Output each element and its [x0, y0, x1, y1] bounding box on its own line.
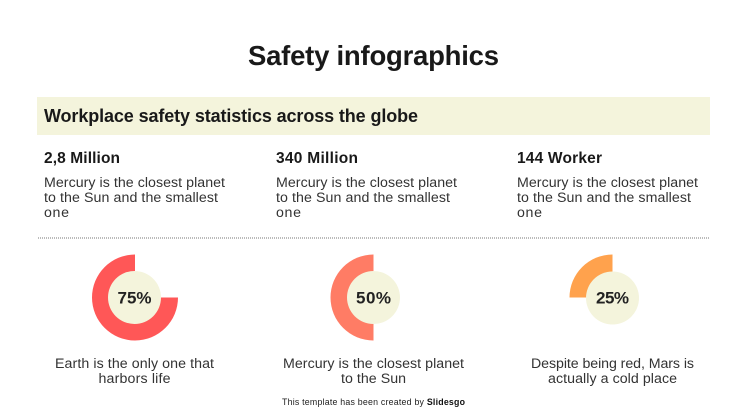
stat block: 144 Worker: 144 Worker: [517, 150, 602, 167]
stat block: 144 Worker: [517, 150, 698, 221]
donut chart: 75%: 75%: [118, 288, 152, 308]
stat block: 340 Million: one: [276, 205, 301, 221]
caption: 75%: [55, 356, 214, 387]
footer credit: This template has been created by Slidesgo: [282, 397, 466, 407]
stat block: 2,8 Million: Mercury is the closest planet: [44, 175, 225, 191]
caption: 75%: harbors life: [98, 371, 171, 387]
caption: 25%: Despite being red, Mars is: [531, 356, 694, 372]
stat block: 144 Worker: one: [517, 205, 542, 221]
stat block: 2,8 Million: to the Sun and the smallest: [44, 190, 218, 206]
caption: 75%: Earth is the only one that: [55, 356, 214, 372]
banner: section heading: [37, 97, 710, 135]
stat block: 2,8 Million: [44, 150, 225, 221]
stat block: 340 Million: 340 Million: [276, 150, 358, 167]
caption: 50%: Mercury is the closest planet: [283, 356, 464, 372]
stat block: 2,8 Million: 2,8 Million: [44, 150, 120, 167]
caption: 50%: to the Sun: [341, 371, 406, 387]
stat block: 2,8 Million: one: [44, 205, 69, 221]
title: Safety infographics: [248, 40, 499, 71]
stat block: 144 Worker: to the Sun and the smallest: [517, 190, 691, 206]
donut chart: 25%: [570, 254, 639, 324]
stat block: 340 Million: to the Sun and the smallest: [276, 190, 450, 206]
stat block: 340 Million: Mercury is the closest planet: [276, 175, 457, 191]
banner: section heading: Workplace safety statistics across the globe: [44, 106, 418, 126]
caption: 25%: [531, 356, 694, 387]
caption: 50%: [283, 356, 464, 387]
donut chart: 25%: 25%: [596, 288, 629, 308]
donut chart: 50%: [330, 254, 400, 340]
stat block: 340 Million: [276, 150, 457, 221]
donut chart: 50%: 50%: [356, 288, 391, 308]
stat block: 144 Worker: Mercury is the closest planet: [517, 175, 698, 191]
donut chart: 75%: [92, 254, 178, 340]
caption: 25%: actually a cold place: [548, 371, 677, 387]
